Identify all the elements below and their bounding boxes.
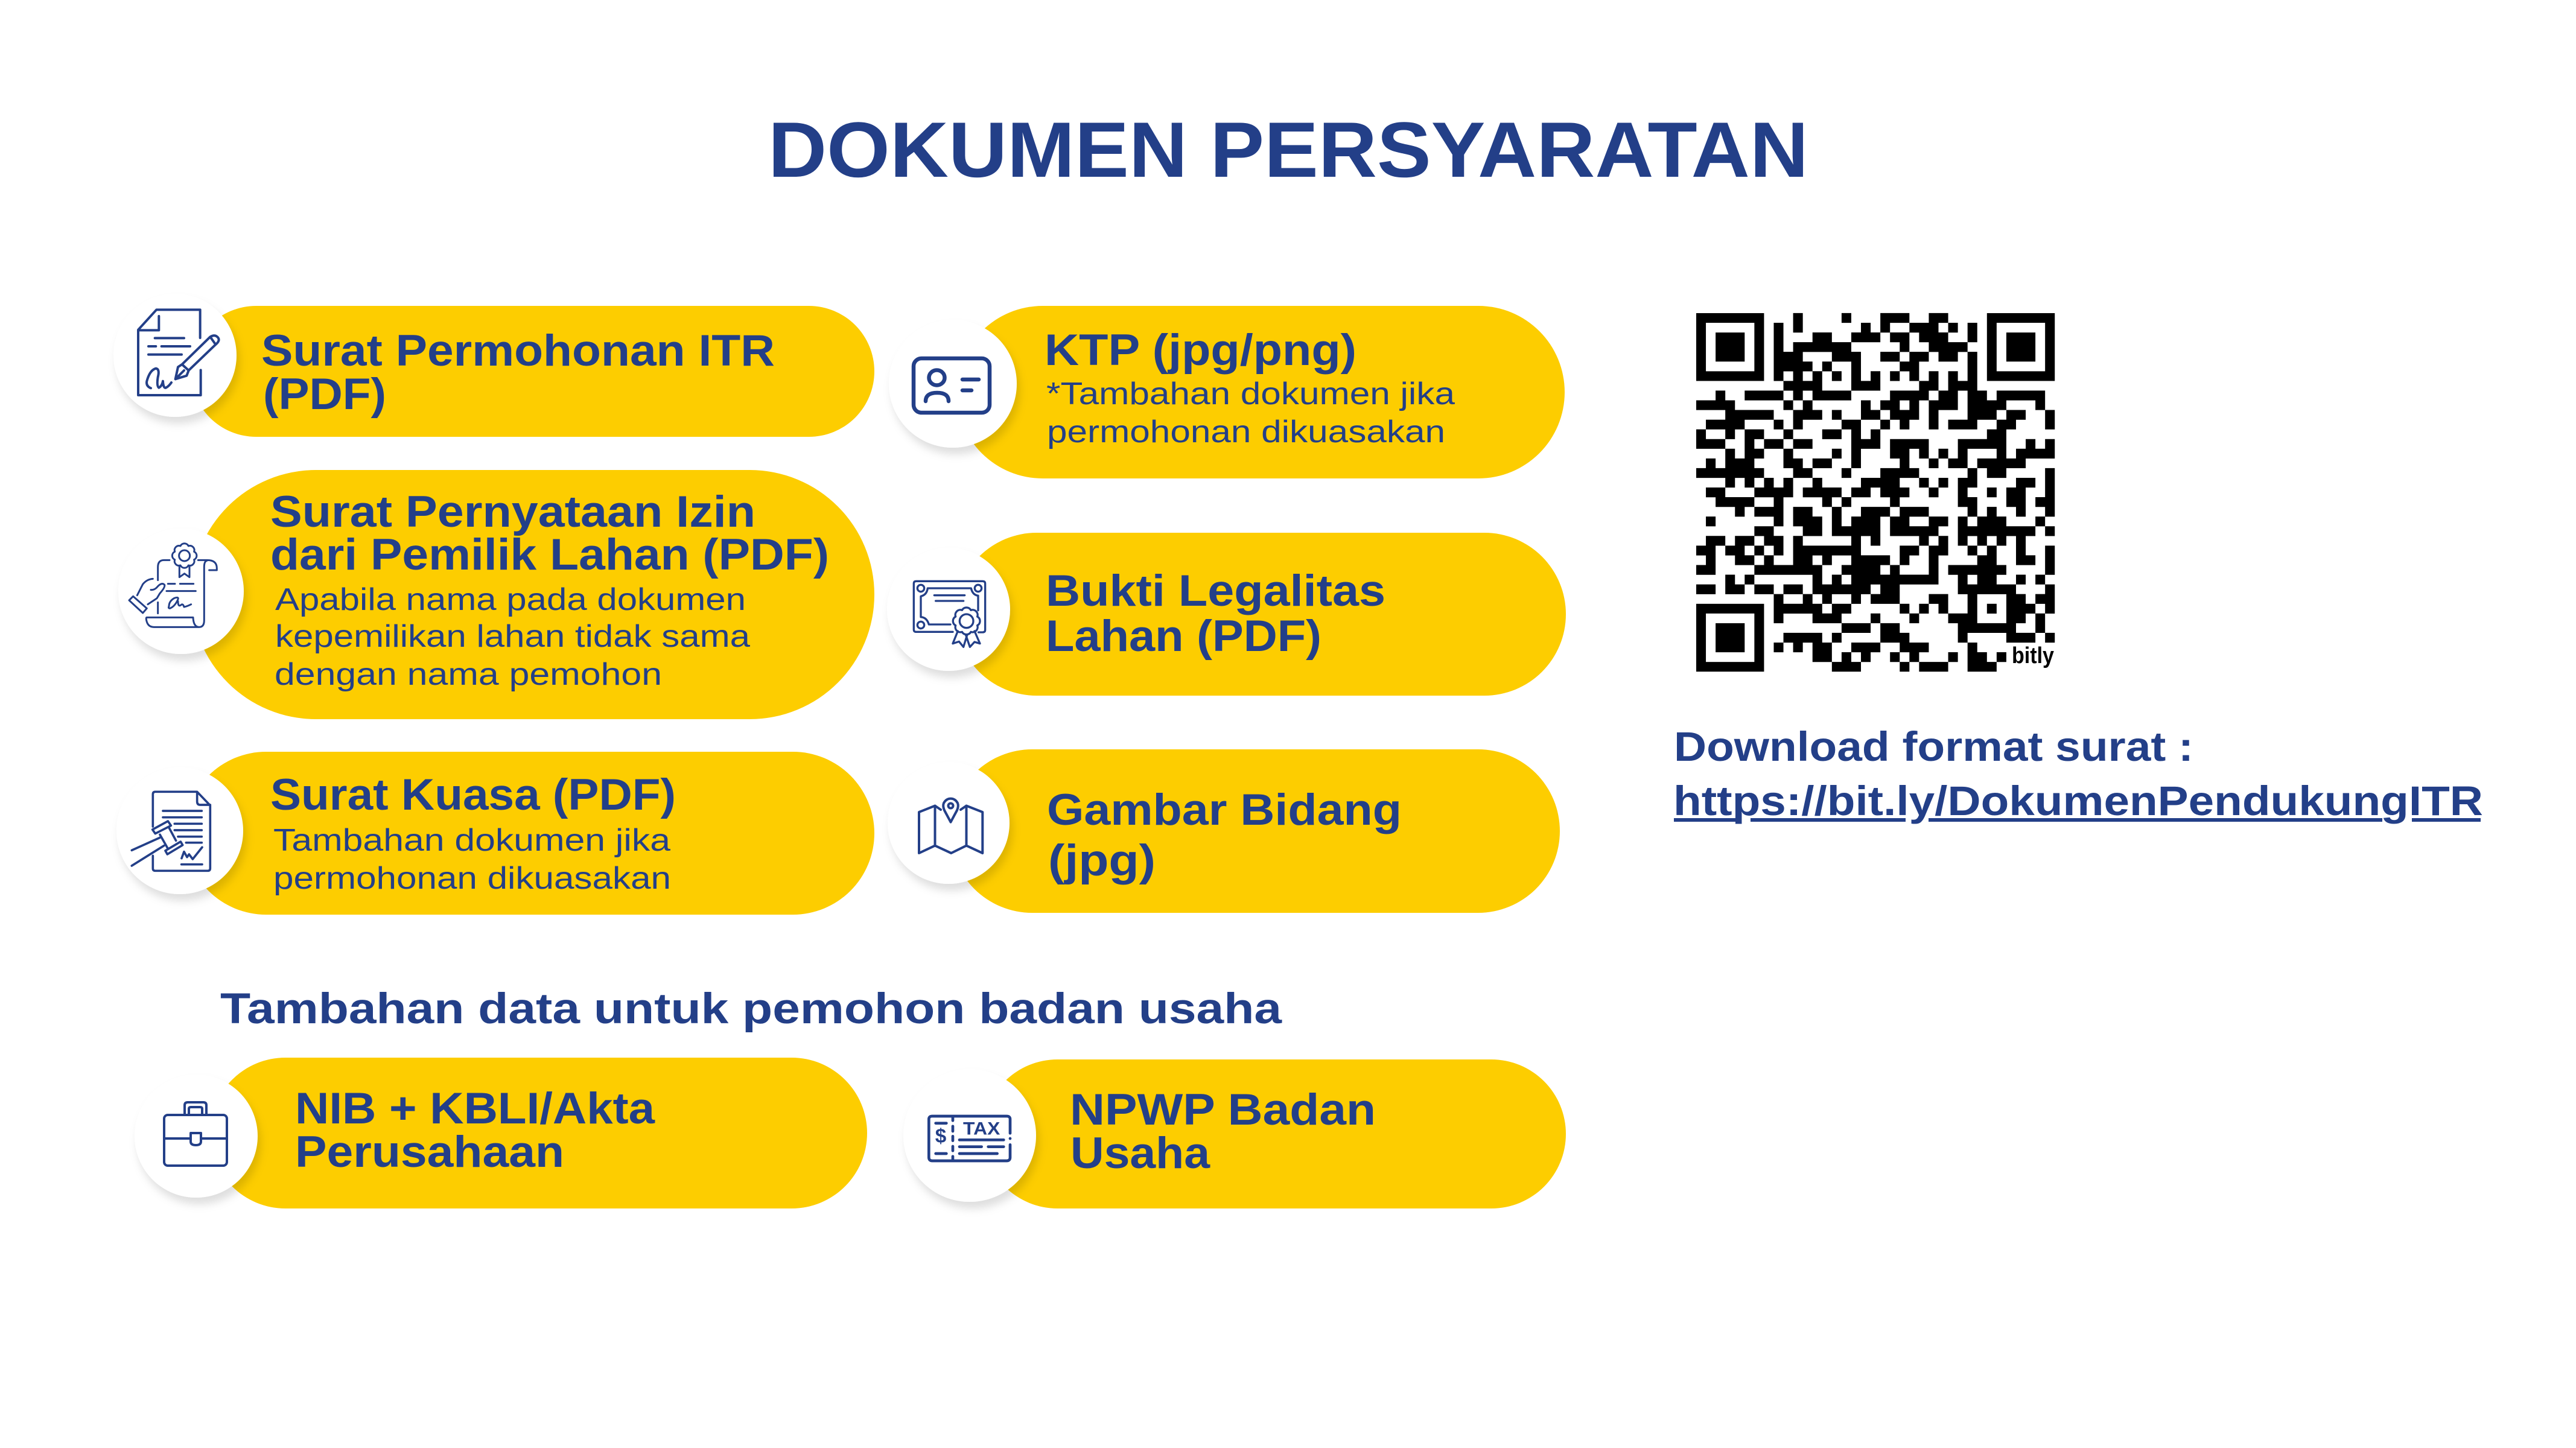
heading: NPWP Badan [1070,1085,1376,1134]
icon: tax ticket: $ [935,1125,947,1148]
icon badge [135,1075,258,1198]
icon: tax ticket: TAX [963,1119,1000,1138]
panel: Surat Permohonan ITR [113,294,874,437]
description: *Tambahan dokumen jika [1046,376,1455,411]
heading [261,326,775,419]
heading: (jpg) [1048,836,1156,885]
QR code [1696,313,2055,672]
description [275,582,750,692]
heading: Surat Permohonan ITR [261,326,775,375]
icon: briefcase [164,1102,227,1166]
download label: Download format surat : [1674,723,2193,770]
panel: NIB KBLI Akta [135,1058,867,1208]
heading: KTP (jpg/png) [1045,326,1356,375]
heading: Lahan (PDF) [1046,612,1321,661]
description: Tambahan dokumen jika [273,823,670,858]
pill [191,306,874,437]
icon badge [903,1069,1036,1202]
heading [270,487,829,579]
icon: certificate with rosette [914,581,985,647]
pill [950,749,1560,913]
description: dengan nama pemohon [275,657,662,692]
icon badge [113,294,237,417]
heading [1047,786,1402,885]
heading: (PDF) [263,370,386,419]
title: DOKUMEN PERSYARATAN [768,106,1808,194]
icon badge [887,548,1010,671]
heading [1070,1085,1376,1178]
description: Apabila nama pada dokumen [275,582,746,617]
pill [210,1058,867,1208]
pill [191,470,874,719]
description: kepemilikan lahan tidak sama [275,619,750,654]
panel: Surat Kuasa [116,752,874,915]
icon: id card [914,358,990,413]
icon: signed document with pen [138,310,219,395]
heading: Perusahaan [295,1128,564,1176]
heading: NIB + KBLI/Akta [295,1084,655,1133]
heading [1046,567,1385,661]
description [273,823,671,896]
heading: Surat Kuasa (PDF) [270,770,676,819]
bitly mark: bitly [2012,643,2054,668]
description: permohonan dikuasakan [1047,414,1445,449]
panel: Bukti Legalitas [887,533,1566,696]
section heading: Tambahan data untuk pemohon badan usaha [220,985,1282,1033]
panel: Gambar Bidang [888,749,1560,913]
panel: Surat Pernyataan Izin [118,470,874,719]
heading: Usaha [1070,1129,1210,1178]
heading: Bukti Legalitas [1046,567,1385,615]
icon badge [889,320,1017,448]
icon badge [888,762,1010,884]
pill [185,752,874,915]
panel: NPWP Badan Usaha [903,1059,1566,1208]
icon: certificate scroll with hand [129,544,217,627]
icon: map with pin [919,799,982,853]
heading: Surat Pernyataan Izin [270,487,755,536]
heading: Gambar Bidang [1047,786,1402,834]
heading [295,1084,655,1176]
download link: https://bit.ly/DokumenPendukungITR [1673,778,2483,824]
description: permohonan dikuasakan [273,861,671,896]
pill [983,1059,1566,1208]
panel: KTP [889,306,1565,478]
icon: document with gavel [132,792,210,871]
heading: dari Pemilik Lahan (PDF) [270,530,829,579]
pill [955,533,1566,696]
icon badge [116,767,243,894]
icon badge [118,529,244,654]
pill [956,306,1565,478]
description [1046,376,1455,449]
icon: tax ticket [929,1116,1010,1161]
